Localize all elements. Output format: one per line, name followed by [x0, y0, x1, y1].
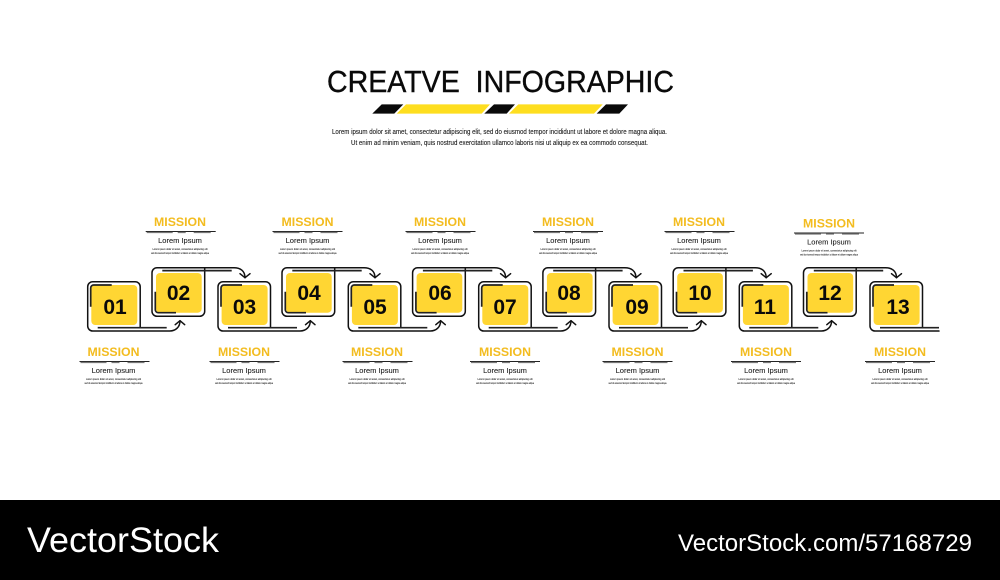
- step 13: [870, 282, 939, 331]
- label: mission 07: Lorem Ipsum: [483, 366, 527, 375]
- label: mission 13: Lorem Ipsum: [878, 366, 922, 375]
- label: mission 04: Lorem ipsum dolor sit amet, consectetur adipiscing elit: [280, 247, 335, 251]
- label: mission 04: [272, 215, 342, 255]
- step 01: [88, 282, 185, 331]
- label: mission 05: [342, 345, 412, 385]
- title: CREATVE INFOGRAPHIC: [327, 64, 674, 99]
- label: mission 09: [602, 345, 672, 385]
- step 04: [282, 268, 380, 316]
- step 11: [739, 282, 836, 331]
- step 13: 13: [886, 296, 910, 319]
- label: mission 05: sed do eiusmod tempor incididunt ut labore et dolore magna aliqua: [348, 381, 406, 385]
- intro text: [332, 129, 667, 147]
- step 08: 08: [557, 282, 581, 305]
- step 12: 12: [818, 282, 842, 305]
- label: mission 09: MISSION: [612, 345, 664, 359]
- footer url: VectorStock.com/57168729: [678, 530, 972, 557]
- footer logo: VectorStock: [27, 521, 220, 560]
- label: mission 11: Lorem Ipsum: [744, 366, 788, 375]
- intro text: Ut enim ad minim veniam, quis nostrud exercitation ullamco laboris nisi ut aliquip ex ea commodo consequat.: [351, 140, 648, 147]
- step 01: 01: [103, 296, 127, 319]
- label: mission 08: sed do eiusmod tempor incididunt ut labore et dolore magna aliqua: [539, 251, 597, 255]
- label: mission 06: Lorem ipsum dolor sit amet, consectetur adipiscing elit: [412, 247, 468, 251]
- step 08: [543, 268, 641, 316]
- step 06: [413, 268, 511, 316]
- label: mission 01: Lorem Ipsum: [92, 366, 135, 375]
- label: mission 05: MISSION: [351, 345, 403, 359]
- step 04: 04: [297, 282, 321, 305]
- label: mission 05: Lorem ipsum dolor sit amet, consectetur adipiscing elit: [350, 377, 405, 381]
- step 02: [152, 268, 250, 316]
- label: mission 05: Lorem Ipsum: [355, 366, 399, 375]
- step 03: [218, 282, 315, 331]
- label: mission 12: Lorem Ipsum: [807, 238, 851, 246]
- label: mission 02: Lorem ipsum dolor sit amet, consectetur adipiscing elit: [152, 247, 208, 251]
- label: mission 13: sed do eiusmod tempor incididunt ut labore et dolore magna aliqua: [871, 381, 929, 385]
- label: mission 12: MISSION: [803, 216, 855, 230]
- label: mission 03: sed do eiusmod tempor incididunt ut labore et dolore magna aliqua: [215, 381, 273, 385]
- label: mission 06: Lorem Ipsum: [418, 236, 462, 245]
- label: mission 07: MISSION: [479, 345, 531, 359]
- label: mission 02: MISSION: [154, 215, 206, 229]
- footer bar: [0, 500, 1000, 580]
- label: mission 01: Lorem ipsum dolor sit amet, consectetur adipiscing elit: [86, 377, 141, 381]
- label: mission 02: Lorem Ipsum: [158, 236, 202, 245]
- label: mission 10: sed do eiusmod tempor incididunt ut labore et dolore magna aliqua: [670, 251, 728, 255]
- step 06: 06: [428, 282, 452, 305]
- step 02: 02: [167, 282, 190, 305]
- label: mission 12: sed do eiusmod tempor incididunt ut labore et dolore magna aliqua: [800, 252, 858, 256]
- label: mission 08: Lorem Ipsum: [546, 236, 590, 245]
- label: mission 06: [406, 215, 476, 255]
- label: mission 06: MISSION: [414, 215, 466, 229]
- step 07: 07: [493, 296, 517, 319]
- label: mission 06: sed do eiusmod tempor incididunt ut labore et dolore magna aliqua: [411, 251, 469, 255]
- step 10: 10: [688, 282, 712, 305]
- label: mission 12: [794, 216, 864, 256]
- label: mission 10: Lorem ipsum dolor sit amet, consectetur adipiscing elit: [672, 247, 727, 251]
- label: mission 10: Lorem Ipsum: [677, 236, 721, 245]
- label: mission 11: Lorem ipsum dolor sit amet, consectetur adipiscing elit: [738, 377, 794, 381]
- label: mission 04: Lorem Ipsum: [286, 236, 329, 245]
- label: mission 10: MISSION: [673, 215, 725, 229]
- step 05: 05: [363, 296, 387, 319]
- label: mission 08: [533, 215, 603, 255]
- label: mission 13: MISSION: [874, 345, 926, 359]
- label: mission 03: MISSION: [218, 345, 270, 359]
- label: mission 09: Lorem ipsum dolor sit amet, consectetur adipiscing elit: [610, 377, 665, 381]
- label: mission 12: Lorem ipsum dolor sit amet, consectetur adipiscing elit: [802, 248, 857, 252]
- step 03: 03: [233, 296, 256, 319]
- label: mission 01: MISSION: [88, 345, 140, 359]
- step 11: 11: [754, 296, 776, 319]
- step 12: [804, 268, 902, 316]
- label: mission 08: MISSION: [542, 215, 594, 229]
- step 05: [348, 282, 445, 331]
- label: mission 07: Lorem ipsum dolor sit amet, consectetur adipiscing elit: [478, 377, 533, 381]
- label: mission 09: Lorem Ipsum: [616, 366, 659, 375]
- label: mission 04: MISSION: [282, 215, 334, 229]
- label: mission 08: Lorem ipsum dolor sit amet, consectetur adipiscing elit: [540, 247, 596, 251]
- label: mission 13: Lorem ipsum dolor sit amet, consectetur adipiscing elit: [872, 377, 928, 381]
- label: mission 02: [146, 215, 216, 255]
- label: mission 03: Lorem Ipsum: [222, 366, 266, 375]
- label: mission 07: [470, 345, 540, 385]
- step 09: [609, 282, 706, 331]
- label: mission 04: sed do eiusmod tempor incididunt ut labore et dolore magna aliqua: [278, 251, 337, 255]
- label: mission 09: sed do eiusmod tempor incididunt ut labore et dolore magna aliqua: [608, 381, 667, 385]
- label: mission 03: [210, 345, 280, 385]
- label: mission 11: sed do eiusmod tempor incididunt ut labore et dolore magna aliqua: [737, 381, 795, 385]
- title stripe bar: [372, 104, 628, 114]
- label: mission 01: sed do eiusmod tempor incididunt ut labore et dolore magna aliqua: [84, 381, 143, 385]
- intro text: Lorem ipsum dolor sit amet, consectetur adipiscing elit, sed do eiusmod tempor incididunt ut labore et dolore magna aliqua.: [332, 129, 667, 136]
- label: mission 10: [664, 215, 734, 255]
- label: mission 11: [731, 345, 801, 385]
- label: mission 13: [865, 345, 935, 385]
- label: mission 03: Lorem ipsum dolor sit amet, consectetur adipiscing elit: [216, 377, 272, 381]
- label: mission 07: sed do eiusmod tempor incididunt ut labore et dolore magna aliqua: [476, 381, 534, 385]
- label: mission 02: sed do eiusmod tempor incididunt ut labore et dolore magna aliqua: [151, 251, 209, 255]
- label: mission 01: [80, 345, 150, 385]
- step 10: [673, 268, 771, 316]
- step 09: 09: [625, 296, 649, 319]
- step 07: [479, 282, 576, 331]
- label: mission 11: MISSION: [740, 345, 792, 359]
